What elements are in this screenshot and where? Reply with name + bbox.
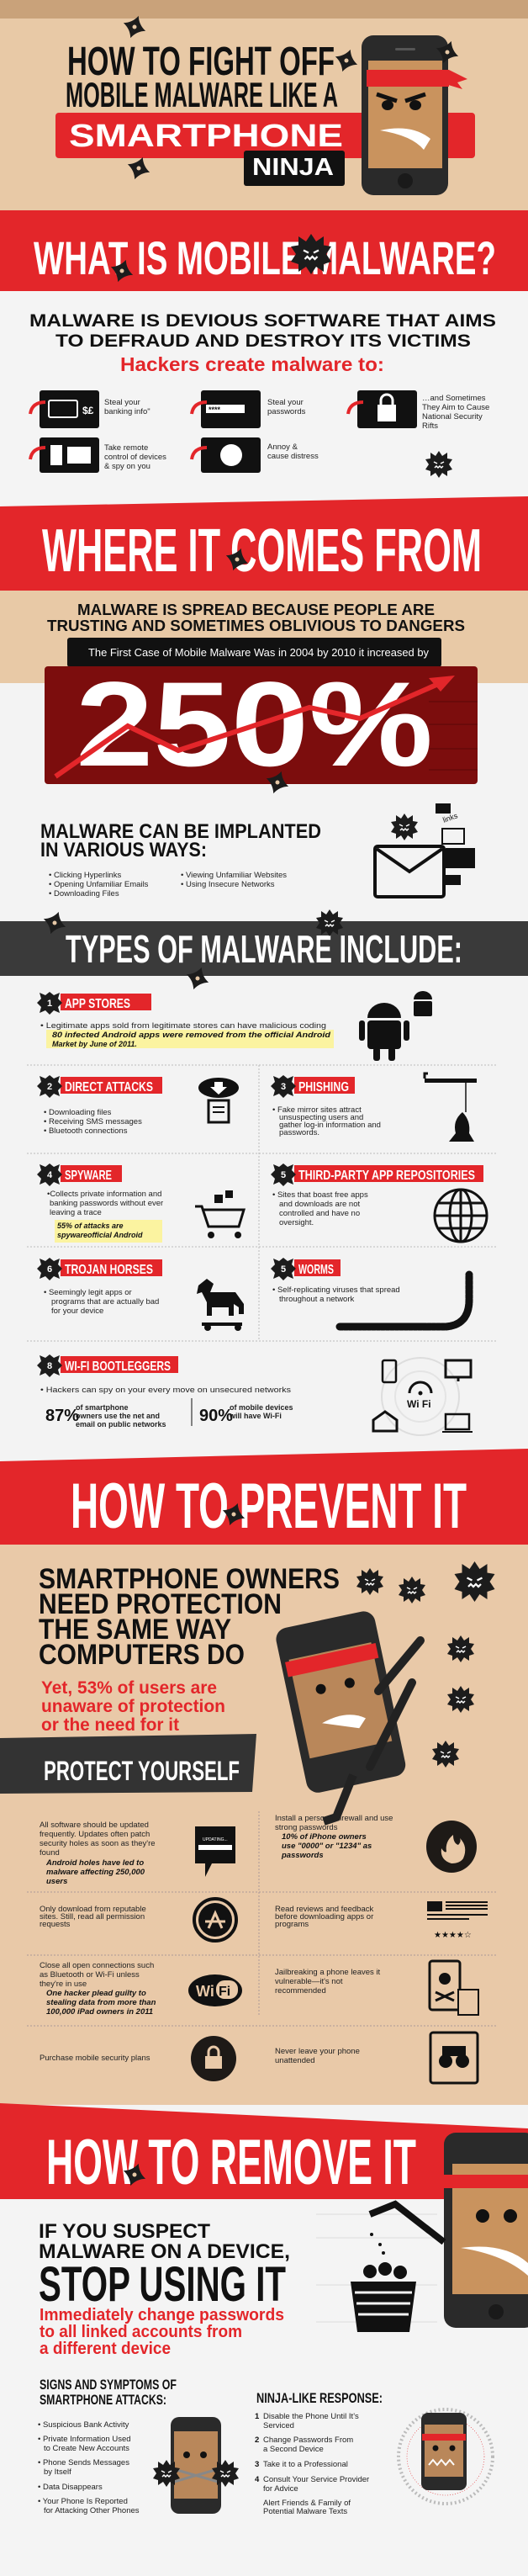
tip: update software: frequently. Updates often patch <box>40 1830 150 1839</box>
panel: malware definition: Rifts <box>422 421 438 431</box>
tip: firewall: strong passwords <box>275 1823 338 1832</box>
panel: spread stats: The First Case of Mobile Malware Was in 2004 by 2010 it increased by <box>88 646 429 659</box>
panel: remove (white) <box>0 2199 528 2576</box>
panel: signs and symptoms: to Create New Accounts <box>44 2444 129 2453</box>
text block: stop using it <box>39 2220 290 2358</box>
panel: ninja-like response: Potential Malware Texts <box>263 2507 347 2516</box>
icon: secure badge <box>191 2036 236 2081</box>
icon: fish hook <box>425 1073 477 1142</box>
title block: SMARTPHONE <box>69 119 343 154</box>
icon: tied-up phone <box>171 2417 221 2514</box>
icon: trash basket <box>351 2233 416 2332</box>
panel: 4 spyware: 4 <box>47 1170 53 1180</box>
tip: never leave phone <box>275 2033 478 2083</box>
tip: reputable sites <box>40 1899 236 1941</box>
panel: malware definition: National Security <box>422 412 483 421</box>
panel: ninja-like response: Alert Friends & Family of <box>263 2499 351 2508</box>
chart: 250% growth: 250% <box>76 658 433 792</box>
panel: 2 direct attacks <box>37 1075 239 1136</box>
panel: 3 phishing <box>271 1073 477 1142</box>
tip: update software: Android holes have led to <box>45 1858 144 1868</box>
title block <box>55 40 475 186</box>
tip: reputable sites: sites. Still, read all permission <box>40 1912 145 1921</box>
tip: firewall: 10% of iPhone owners <box>282 1832 367 1842</box>
icon: review list <box>427 1901 442 1911</box>
icon: malware face <box>291 234 331 274</box>
panel: signs and symptoms: • Data Disappears <box>38 2483 103 2492</box>
panel: 4 spyware <box>37 1163 244 1243</box>
tip: never leave phone: Never leave your phone <box>275 2047 360 2056</box>
panel: 4 spyware: •Collects private information and <box>47 1190 161 1199</box>
panel: 2 direct attacks: • Downloading files <box>44 1108 112 1117</box>
panel: spread stats: TRUSTING AND SOMETIMES OBLIVIOUS TO DANGERS <box>47 617 465 634</box>
icon: envelopes <box>375 803 475 897</box>
panel: 1 app stores: APP STORES <box>65 997 130 1011</box>
panel: malware definition: MALWARE IS DEVIOUS SOFTWARE THAT AIMS <box>29 311 496 331</box>
panel: 3 phishing: gather log-in information and <box>279 1121 381 1130</box>
icon: shopping cart <box>195 1206 244 1227</box>
panel: 5 worms: WORMS <box>298 1263 334 1277</box>
tip: close connections: as Bluetooth or Wi-Fi unless <box>40 1970 140 1980</box>
text block: stop using it: Immediately change passwords <box>40 2306 284 2324</box>
panel: 5 worms: 5 <box>281 1264 286 1275</box>
NINJA badge <box>244 151 345 186</box>
panel: ninja-like response: 3 <box>255 2460 259 2469</box>
text block: implanted ways <box>40 820 321 898</box>
panel: signs and symptoms: SIGNS AND SYMPTOMS OF <box>40 2377 177 2393</box>
phone mascot (remove) <box>370 2133 528 2328</box>
text block: implanted ways: • Clicking Hyperlinks <box>49 871 121 880</box>
heading: protect yourself <box>0 1734 256 1794</box>
panel: signs and symptoms: • Suspicious Bank Activity <box>38 2420 129 2430</box>
tip: firewall <box>275 1814 477 1873</box>
panel: ninja-like response: Serviced <box>263 2421 294 2430</box>
panel: 5 worms <box>271 1258 469 1327</box>
text block: implanted ways: • Opening Unfamiliar Emails <box>49 880 149 889</box>
icon: ninja phone in circle <box>399 2409 493 2504</box>
text block: stop using it: IF YOU SUSPECT <box>39 2220 210 2243</box>
section band: types of malware <box>0 908 528 994</box>
tip: close connections: One hacker plead guilty to <box>46 1989 146 1998</box>
panel: signs and symptoms <box>38 2377 239 2515</box>
panel: malware definition: passwords <box>267 407 306 416</box>
tip: close connections: stealing data from more than <box>46 1998 156 2007</box>
panel: 8 wi-fi bootleggers: of smartphone <box>76 1403 129 1412</box>
panel: spread stats <box>0 591 528 921</box>
panel: malware definition: Steal your <box>267 398 304 407</box>
panel: 5 third-party app repositories: • Sites that boast free apps <box>272 1190 368 1200</box>
panel: 3 phishing: passwords. <box>279 1128 319 1137</box>
panel: spread stats: MALWARE IS SPREAD BECAUSE PEOPLE ARE <box>77 602 435 618</box>
text block: smartphone owners need protection: unaware of protection <box>41 1697 225 1716</box>
panel: ninja-like response: Disable the Phone Until It's <box>263 2412 359 2421</box>
icon: androids <box>359 991 432 1061</box>
text block: stop using it: STOP USING IT <box>39 2257 286 2312</box>
panel: 5 third-party app repositories <box>271 1163 487 1242</box>
icon: fire <box>426 1821 477 1873</box>
black caption bar <box>67 638 441 667</box>
panel: malware definition: They Aim to Cause <box>422 403 489 412</box>
section band: where it comes from <box>0 496 528 591</box>
panel: signs and symptoms: • Your Phone Is Reported <box>38 2497 128 2506</box>
tip: close connections: Wi <box>196 1983 214 2000</box>
panel: prevent (tan) <box>0 1545 528 2105</box>
tip: firewall: passwords <box>281 1851 324 1860</box>
panel: ninja-like response: Change Passwords From <box>263 2436 353 2445</box>
text block: smartphone owners need protection: Yet, 53% of users are <box>41 1678 217 1698</box>
shuriken decorations <box>119 12 462 183</box>
panel: ninja-like response: Consult Your Service Provider <box>263 2475 369 2484</box>
panel: malware definition <box>0 291 528 505</box>
icon: wifi network <box>373 1358 473 1435</box>
panel: 3 phishing: unsuspecting users and <box>279 1113 363 1122</box>
tip: update software: found <box>40 1848 60 1858</box>
panel: 3 phishing: 3 <box>281 1082 286 1092</box>
tip: close connections <box>40 1961 242 2017</box>
icon: banking: $£ <box>82 405 94 416</box>
text block: implanted ways: • Using Insecure Networks <box>181 880 275 889</box>
panel: 6 trojan horses: programs that are actually bad <box>51 1297 159 1307</box>
panel: 1 app stores: Market by June of 2011. <box>52 1040 137 1048</box>
tip: read reviews: Read reviews and feedback <box>275 1905 373 1914</box>
icon: updating <box>195 1826 235 1877</box>
tip: read reviews: ★★★★☆ <box>434 1931 472 1940</box>
icon: envelopes: links <box>441 811 459 824</box>
panel: 8 wi-fi bootleggers: of mobile devices <box>230 1403 293 1412</box>
tip: update software: malware affecting 250,000 <box>46 1868 145 1877</box>
panel: ninja-like response: 4 <box>255 2475 260 2484</box>
text block: implanted ways: • Downloading Files <box>49 889 119 898</box>
panel: 2 direct attacks: • Receiving SMS messages <box>44 1117 142 1126</box>
heading: protect yourself: PROTECT YOURSELF <box>44 1756 240 1786</box>
panel: signs and symptoms: • Phone Sends Messages <box>38 2458 129 2467</box>
panel: 8 wi-fi bootleggers <box>37 1354 473 1435</box>
panel: 8 wi-fi bootleggers: will have Wi-Fi <box>229 1412 282 1420</box>
text block: stop using it: to all linked accounts from <box>40 2323 242 2341</box>
text block: implanted ways: MALWARE CAN BE IMPLANTED <box>40 820 321 843</box>
tip: read reviews: before downloading apps or <box>275 1912 373 1921</box>
panel: 8 wi-fi bootleggers: • Hackers can spy on your every move on unsecured networks <box>40 1386 292 1394</box>
tip: security plans: Purchase mobile security plans <box>40 2054 150 2063</box>
red SMARTPHONE banner <box>55 113 475 158</box>
icon: app store <box>194 1899 236 1941</box>
panel: 6 trojan horses: for your device <box>51 1307 103 1316</box>
panel: 6 trojan horses: • Seemingly legit apps or <box>44 1288 132 1297</box>
text block: smartphone owners need protection: COMPUTERS DO <box>39 1639 245 1671</box>
panel: 2 direct attacks: 2 <box>47 1082 52 1092</box>
panel: 8 wi-fi bootleggers: email on public networks <box>76 1420 166 1428</box>
icon: remote control <box>30 437 99 473</box>
panel: 1 app stores: 80 infected Android apps were removed from the official Android <box>52 1031 331 1039</box>
title line 1: HOW TO FIGHT OFF <box>67 40 335 84</box>
tip: jailbreaking <box>275 1961 478 2015</box>
panel: ninja-like response: Take it to a Professional <box>263 2460 348 2469</box>
panel: malware definition: control of devices <box>104 453 166 462</box>
tip: close connections: 100,000 iPad owners in 2011 <box>46 2007 153 2017</box>
text block: smartphone owners need protection: or the need for it <box>41 1715 179 1735</box>
panel: 5 worms: • Self-replicating viruses that spread <box>272 1285 400 1295</box>
text block: stop using it: MALWARE ON A DEVICE, <box>39 2240 290 2263</box>
tip: jailbreaking: vulnerable—it's not <box>275 1977 343 1986</box>
panel: 4 spyware: spywareofficial Android <box>57 1231 143 1239</box>
panel: 4 spyware: SPYWARE <box>65 1169 112 1183</box>
icon: worm <box>340 1275 469 1327</box>
tip: update software: security holes as soon as they're <box>40 1839 156 1848</box>
panel: malware definition: Take remote <box>104 443 148 453</box>
panel: malware definition: Steal your <box>104 398 140 407</box>
panel: 5 third-party app repositories: 5 <box>281 1170 286 1180</box>
panel: signs and symptoms: • Private Information Used <box>38 2435 131 2444</box>
panel: 6 trojan horses: TROJAN HORSES <box>65 1263 153 1277</box>
panel: 5 third-party app repositories: controlled and have no <box>279 1209 360 1218</box>
text block: smartphone owners need protection: THE SAME WAY <box>39 1614 231 1646</box>
section band: what is mobile malware <box>0 210 528 291</box>
icon: globe <box>435 1190 487 1242</box>
dividers <box>27 1065 498 1341</box>
panel: 8 wi-fi bootleggers: WI-FI BOOTLEGGERS <box>65 1360 171 1374</box>
tip: security plans <box>40 2036 236 2081</box>
text block: smartphone owners need protection: NEED PROTECTION <box>39 1588 282 1620</box>
panel: malware definition: banking info" <box>104 407 150 416</box>
panel: malware definition: cause distress <box>267 452 319 461</box>
icon: wifi logo <box>188 1974 242 2006</box>
panel: malware definition: Hackers create malware to: <box>120 353 384 375</box>
icon: wifi network: Wi Fi <box>407 1398 431 1410</box>
tip: read reviews <box>275 1901 488 1940</box>
ninja phone kicking malware <box>274 1561 494 1821</box>
panel: 5 third-party app repositories: THIRD-PARTY APP REPOSITORIES <box>298 1169 475 1183</box>
panel: 4 spyware: 55% of attacks are <box>57 1222 124 1230</box>
tip: jailbreaking: Jailbreaking a phone leaves it <box>275 1968 381 1977</box>
icon: small malware <box>425 451 452 478</box>
panel: 1 app stores: • Legitimate apps sold from legitimate stores can have malicious coding <box>40 1021 326 1030</box>
panel: signs and symptoms: by Itself <box>44 2467 71 2477</box>
ninja phone mascot (header) <box>362 35 467 195</box>
icon: trojan horse <box>197 1279 244 1331</box>
panel: 2 direct attacks: • Bluetooth connections <box>44 1126 128 1136</box>
text block: implanted ways: IN VARIOUS WAYS: <box>40 839 207 861</box>
icon: password <box>192 390 261 428</box>
tip: update software: users <box>46 1877 67 1886</box>
panel: signs and symptoms: for Attacking Other Phones <box>44 2506 140 2515</box>
panel: 3 phishing: • Fake mirror sites attract <box>272 1105 362 1115</box>
title line 2: MOBILE MALWARE LIKE A <box>66 75 338 114</box>
panel: malware definition: TO DEFRAUD AND DESTROY ITS VICTIMS <box>55 331 471 351</box>
tip: update software: UPDATING... <box>203 1837 228 1842</box>
panel: 8 wi-fi bootleggers: 8 <box>47 1361 52 1371</box>
icon: distress face <box>192 437 261 473</box>
panel: malware definition: …and Sometimes <box>422 394 486 403</box>
panel: 6 trojan horses <box>37 1258 244 1331</box>
panel: signs and symptoms: SMARTPHONE ATTACKS: <box>40 2392 166 2408</box>
tip: firewall: Install a personal firewall and use <box>275 1814 393 1823</box>
tip: jailbreaking: recommended <box>275 1986 326 1996</box>
panel: malware definition: Annoy & <box>267 443 298 452</box>
text block: smartphone owners need protection <box>39 1563 340 1735</box>
tip: update software <box>40 1821 235 1886</box>
tip: reputable sites: Only download from reputable <box>40 1905 146 1914</box>
panel: ninja-like response: a Second Device <box>263 2445 324 2454</box>
panel: ninja-like response <box>255 2390 493 2516</box>
title block: NINJA <box>252 154 334 181</box>
stat: 87%: 87% <box>45 1407 79 1425</box>
tip: never leave phone: unattended <box>275 2056 315 2065</box>
tip: close connections: Close all open connections such <box>40 1961 154 1970</box>
section band: how to prevent it <box>0 1449 528 1545</box>
panel: ninja-like response: NINJA-LIKE RESPONSE: <box>256 2390 383 2406</box>
icon: banking <box>30 390 99 428</box>
tip: firewall: use "0000" or "1234" as <box>282 1842 372 1851</box>
panel: 4 spyware: banking passwords without ever <box>50 1199 163 1208</box>
icon: lock <box>348 390 417 428</box>
panel: 1 app stores: 1 <box>47 999 52 1009</box>
tip: update software: All software should be updated <box>40 1821 149 1830</box>
section band: how to remove it <box>0 2103 528 2199</box>
panel: malware definition: & spy on you <box>104 462 150 471</box>
tip: read reviews: programs <box>275 1920 309 1929</box>
panel: ninja-like response: for Advice <box>263 2484 298 2494</box>
text block: implanted ways: • Viewing Unfamiliar Websites <box>181 871 287 880</box>
tip: close connections: they're in use <box>40 1980 87 1989</box>
panel: 3 phishing: PHISHING <box>298 1080 349 1095</box>
panel: 6 trojan horses: 6 <box>47 1264 52 1275</box>
background: header tan <box>0 0 528 210</box>
panel: 5 third-party app repositories: oversight. <box>279 1218 314 1227</box>
text block: stop using it: a different device <box>40 2340 171 2358</box>
icon: skull tablet <box>430 1961 460 2010</box>
panel: ninja-like response: 1 <box>255 2412 260 2421</box>
tip: reputable sites: requests <box>40 1920 71 1929</box>
icon: password: **** <box>209 405 221 414</box>
panel: 2 direct attacks: DIRECT ATTACKS <box>65 1080 153 1095</box>
panel: 8 wi-fi bootleggers: owners use the net and <box>76 1412 160 1420</box>
panel: ninja-like response: 2 <box>255 2436 259 2445</box>
panel: 1 app stores <box>37 991 432 1061</box>
dividers <box>27 1892 498 2026</box>
stat: 90%: 90% <box>199 1407 233 1425</box>
icon: cloud download <box>198 1078 239 1122</box>
icon: binoculars tablet <box>430 2033 478 2083</box>
panel: 5 third-party app repositories: and downloads are not <box>279 1200 360 1209</box>
panel: 4 spyware: leaving a trace <box>50 1208 102 1217</box>
text block: smartphone owners need protection: SMARTPHONE OWNERS <box>39 1563 340 1595</box>
tip: close connections: Fi <box>219 1985 230 1999</box>
panel: 5 worms: throughout a network <box>279 1295 355 1304</box>
